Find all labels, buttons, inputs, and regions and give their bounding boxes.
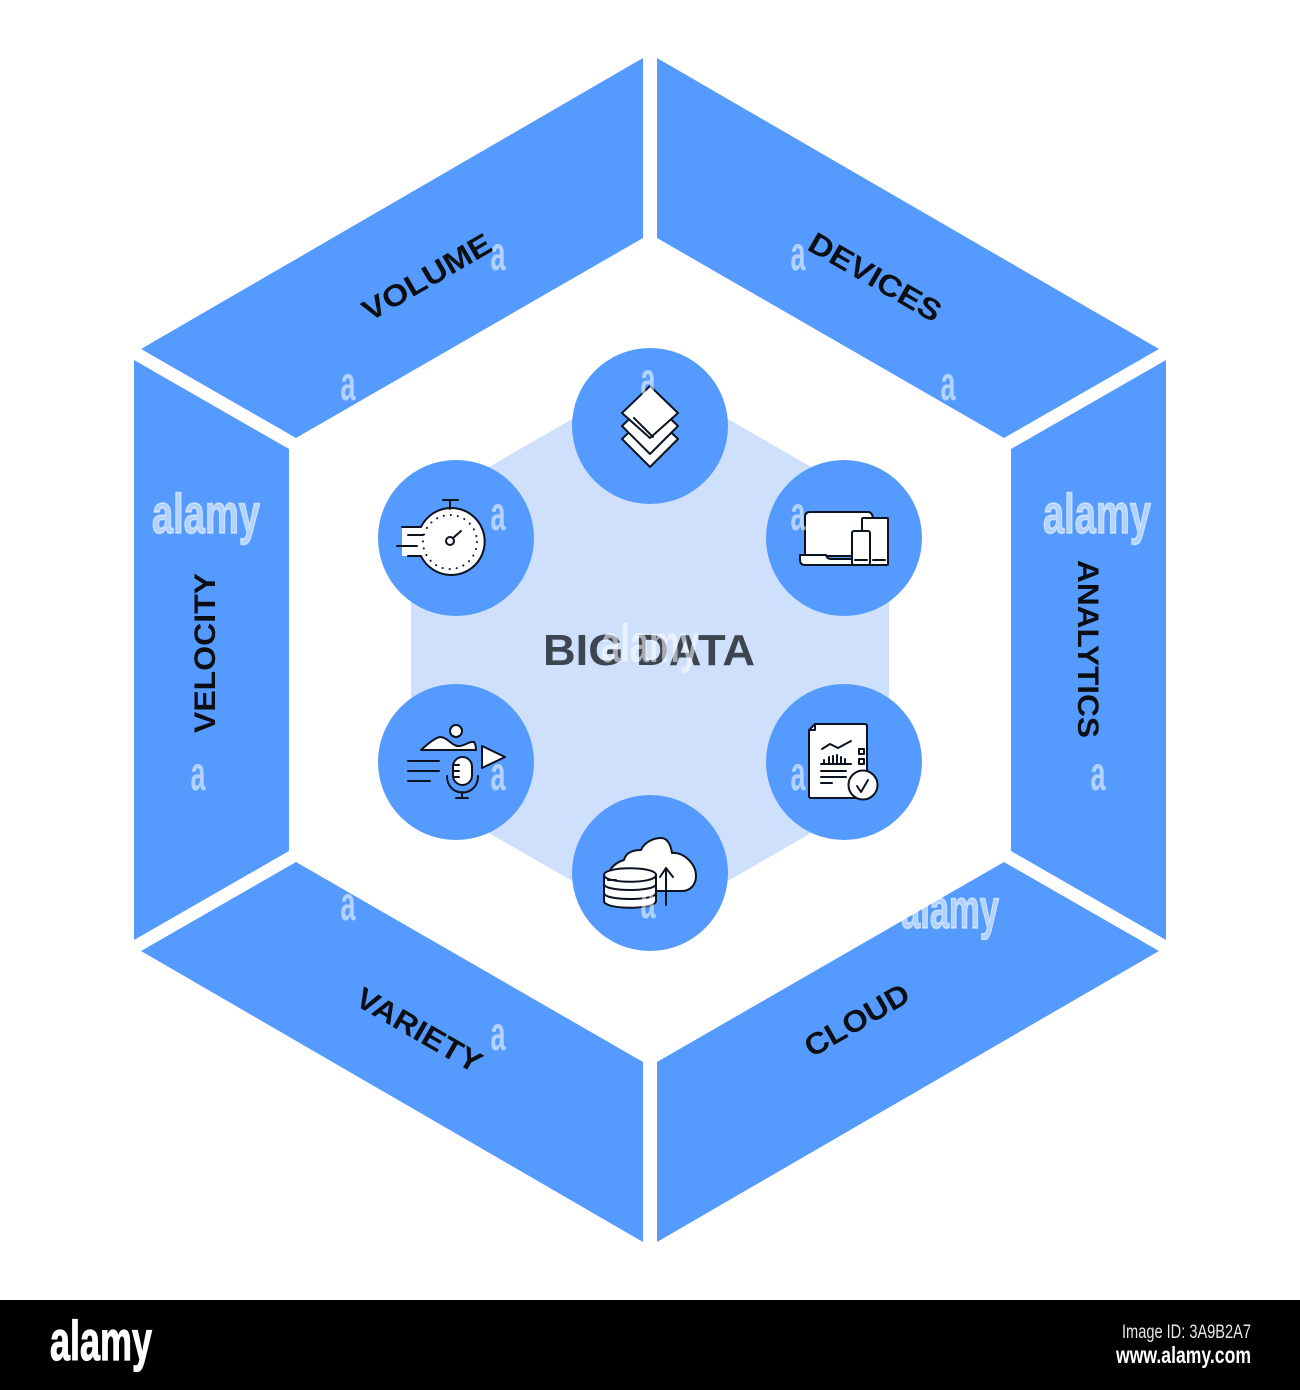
segment: devices: DEVICES bbox=[802, 226, 947, 329]
watermark: a bbox=[490, 1008, 506, 1061]
circle icon: media bbox=[378, 684, 534, 840]
segment: velocity bbox=[134, 360, 289, 940]
footer image id: Image ID: 3A9B2A7 bbox=[1122, 1322, 1251, 1343]
watermark: alamy bbox=[901, 877, 999, 940]
inner light hexagon bbox=[411, 374, 889, 926]
segment: variety bbox=[141, 862, 643, 1242]
watermark: a bbox=[190, 748, 206, 801]
watermark: a bbox=[490, 748, 506, 801]
circle icon: analytics report bbox=[766, 684, 922, 840]
segment: velocity: VELOCITY bbox=[189, 573, 222, 733]
watermark: a bbox=[1090, 748, 1106, 801]
watermark: alamy bbox=[1043, 482, 1151, 545]
circle icon: stopwatch bbox=[378, 460, 534, 616]
watermark: a bbox=[490, 488, 506, 541]
circle icon: layers bbox=[572, 348, 728, 504]
watermark: a bbox=[640, 354, 656, 407]
circle icon: cloud database bbox=[572, 795, 728, 951]
segment: cloud bbox=[657, 862, 1159, 1242]
watermark: alamy bbox=[601, 614, 699, 674]
segment: variety: VARIETY bbox=[350, 981, 488, 1080]
watermark: a bbox=[940, 358, 956, 411]
watermark bbox=[152, 228, 1151, 1061]
footer logo: alamy bbox=[50, 1309, 152, 1372]
watermark: a bbox=[340, 358, 356, 411]
watermark: a bbox=[340, 878, 356, 931]
watermark: a bbox=[490, 228, 506, 281]
watermark: a bbox=[790, 488, 806, 541]
watermark: a bbox=[640, 876, 656, 929]
segment: cloud: CLOUD bbox=[799, 977, 916, 1064]
panel: outer hexagon segments bbox=[134, 58, 1166, 1242]
circle icon: devices bbox=[766, 460, 922, 616]
segment: volume bbox=[141, 58, 643, 438]
footer url: www.alamy.com bbox=[1115, 1342, 1251, 1368]
segment: analytics: ANALYTICS bbox=[1071, 560, 1104, 738]
watermark: a bbox=[790, 228, 806, 281]
watermark: alamy bbox=[152, 482, 260, 545]
segment: volume: VOLUME bbox=[357, 227, 498, 328]
title: BIG DATA bbox=[543, 626, 755, 675]
segment: analytics bbox=[1011, 360, 1166, 940]
footer bar bbox=[0, 1300, 1300, 1390]
watermark: a bbox=[790, 748, 806, 801]
segment: devices bbox=[657, 58, 1159, 438]
